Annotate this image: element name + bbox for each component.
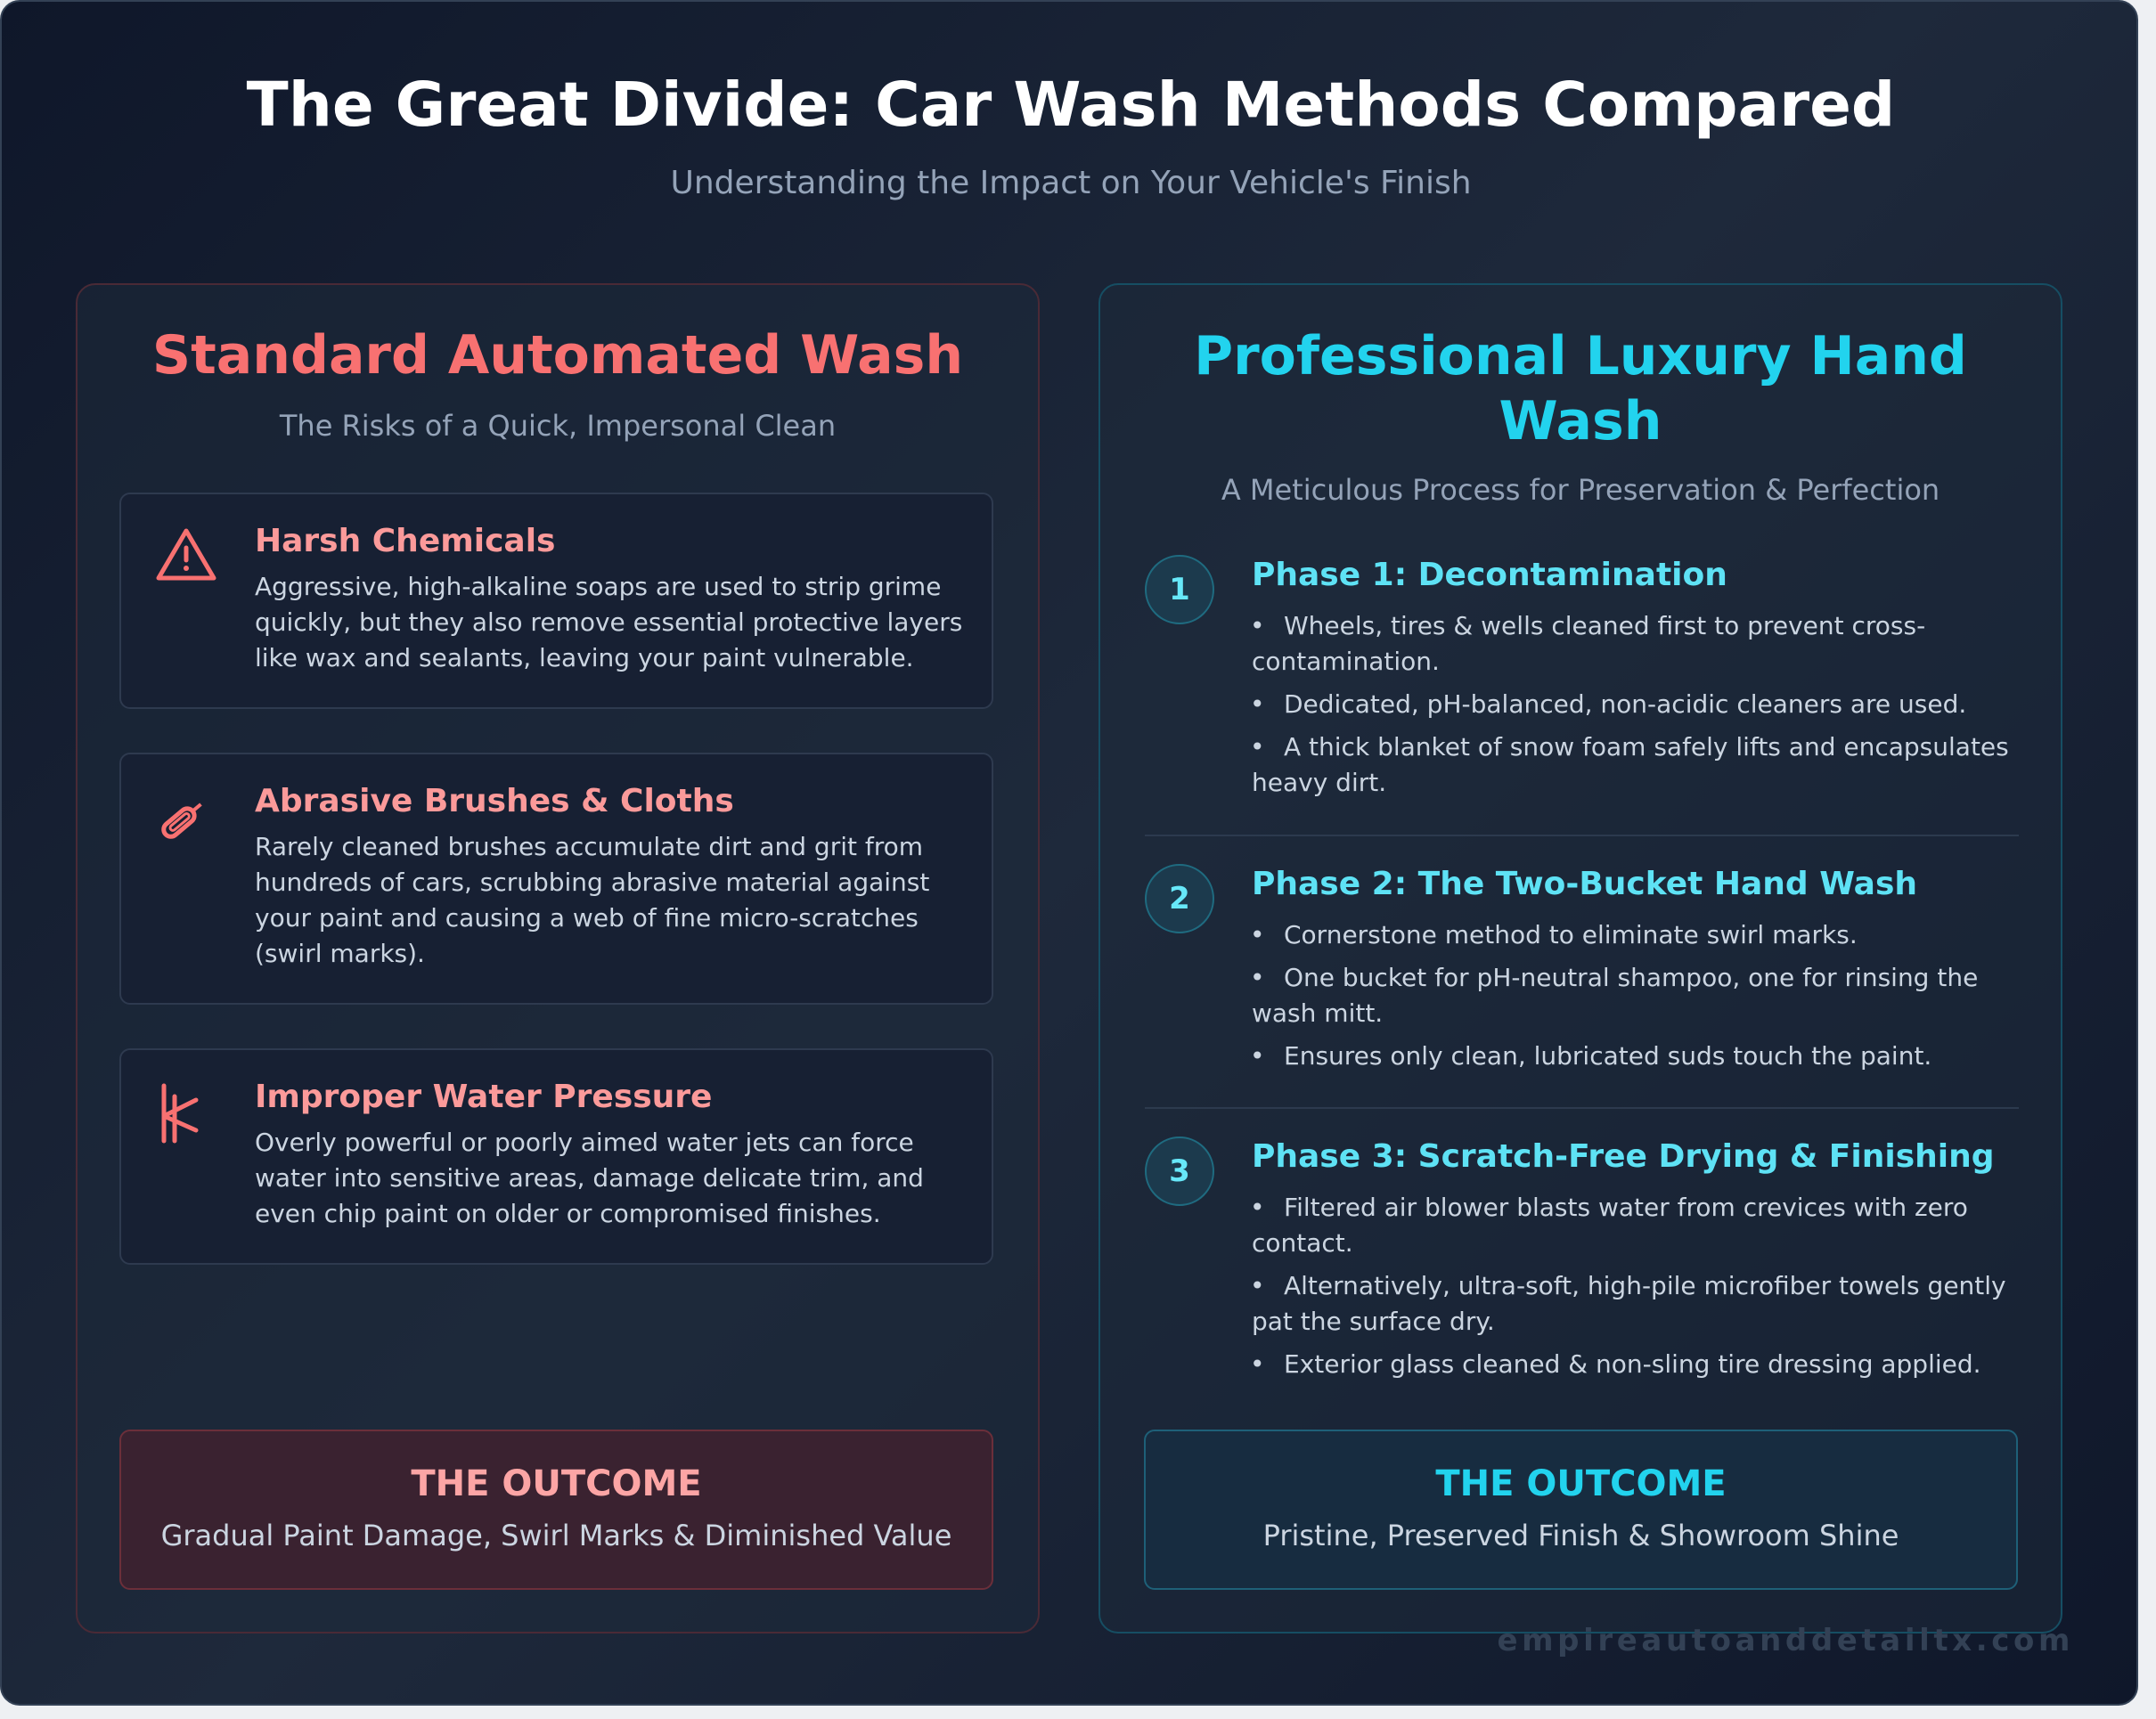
phase 3 bullets bbox=[1252, 1193, 2006, 1379]
phase 2 bbox=[1145, 864, 1978, 1071]
body: Rarely cleaned brushes accumulate dirt and grit from hundreds of cars, scrubbing abrasive material against your paint and causing a web of fine micro-scratches (swirl marks). bbox=[255, 832, 929, 968]
phase 2 bullets bbox=[1252, 920, 1978, 1071]
number badge 2 bbox=[1145, 864, 1214, 933]
icon: brush bbox=[161, 803, 202, 839]
outcome box: left: THE OUTCOME bbox=[411, 1463, 702, 1504]
subtitle: Understanding the Impact on Your Vehicle's Finish bbox=[670, 165, 1472, 201]
phase 2 bullets: Cornerstone method to eliminate swirl marks. bbox=[1284, 920, 1858, 949]
card: abrasive brushes bbox=[119, 753, 993, 1005]
outcome box: left: Gradual Paint Damage, Swirl Marks & Diminished Value bbox=[161, 1519, 951, 1552]
outcome box: left bbox=[119, 1430, 993, 1590]
number badge 3 bbox=[1145, 1136, 1214, 1206]
icon: water jets bbox=[162, 1083, 198, 1144]
right heading bbox=[1194, 325, 1967, 452]
right subtitle: A Meticulous Process for Preservation & Perfection bbox=[1221, 473, 1940, 507]
title: The Great Divide: Car Wash Methods Compared bbox=[247, 69, 1895, 141]
panel: standard automated wash bbox=[76, 283, 1040, 1633]
outcome box: right bbox=[1144, 1430, 2018, 1590]
title: Improper Water Pressure bbox=[255, 1079, 712, 1115]
icon: warning bbox=[157, 529, 216, 581]
phase 2 title: Phase 2: The Two-Bucket Hand Wash bbox=[1252, 866, 1917, 902]
phase 1 bullets: A thick blanket of snow foam safely lifts and encapsulates heavy dirt. bbox=[1252, 732, 2009, 797]
body: Overly powerful or poorly aimed water jets can force water into sensitive areas, damage delicate trim, and even chip paint on older or compromised finishes. bbox=[255, 1128, 924, 1228]
title: Harsh Chemicals bbox=[255, 523, 555, 559]
right heading: Wash bbox=[1499, 390, 1662, 452]
phase 2 bullets: One bucket for pH-neutral shampoo, one for rinsing the wash mitt. bbox=[1252, 963, 1978, 1028]
number badge 1: 1 bbox=[1169, 572, 1190, 607]
left heading: Standard Automated Wash bbox=[152, 324, 963, 387]
phase 1 bullets: Wheels, tires & wells cleaned first to prevent cross-contamination. bbox=[1252, 611, 1925, 676]
number badge 1 bbox=[1145, 555, 1214, 624]
phase 1 bullets: Dedicated, pH-balanced, non-acidic cleaners are used. bbox=[1284, 689, 1966, 719]
number badge 3: 3 bbox=[1169, 1153, 1190, 1189]
number badge 2: 2 bbox=[1169, 881, 1190, 917]
phase 1 bbox=[1145, 555, 2009, 797]
phase 3 bullets: Alternatively, ultra-soft, high-pile microfiber towels gently pat the surface dry. bbox=[1252, 1271, 2006, 1336]
right heading: Professional Luxury Hand bbox=[1194, 325, 1967, 387]
phase 1 title: Phase 1: Decontamination bbox=[1252, 557, 1727, 593]
phase 3 bbox=[1145, 1136, 2006, 1379]
card: water pressure bbox=[119, 1048, 993, 1265]
phase 2 bullets: Ensures only clean, lubricated suds touch the paint. bbox=[1284, 1041, 1931, 1071]
panel: professional hand wash bbox=[1098, 283, 2062, 1633]
left subtitle: The Risks of a Quick, Impersonal Clean bbox=[280, 409, 836, 443]
phase 1 bullets bbox=[1252, 611, 2009, 797]
watermark: empireautoanddetailtx.com bbox=[1497, 1623, 2074, 1658]
phase 3 bullets: Filtered air blower blasts water from crevices with zero contact. bbox=[1252, 1193, 1968, 1258]
outcome box: right: Pristine, Preserved Finish & Showroom Shine bbox=[1263, 1519, 1899, 1552]
title: Abrasive Brushes & Cloths bbox=[255, 783, 734, 819]
card: harsh chemicals bbox=[119, 493, 993, 709]
phase 3 title: Phase 3: Scratch-Free Drying & Finishing bbox=[1252, 1138, 1995, 1175]
body: Aggressive, high-alkaline soaps are used to strip grime quickly, but they also remove essential protective layers like wax and sealants, leaving your paint vulnerable. bbox=[255, 572, 962, 672]
outcome box: right: THE OUTCOME bbox=[1435, 1463, 1727, 1504]
phase 3 bullets: Exterior glass cleaned & non-sling tire dressing applied. bbox=[1284, 1349, 1981, 1379]
